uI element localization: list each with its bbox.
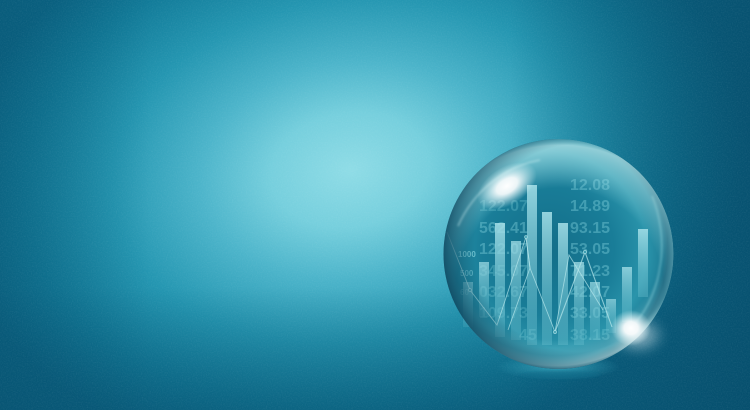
specular highlight: top left [469, 152, 545, 220]
line chart [447, 232, 612, 334]
faded figures behind the chart: 42.07 [570, 284, 610, 301]
faded figures behind the chart: 562.41 [479, 220, 528, 237]
faded figures behind the chart [458, 177, 610, 344]
faded figures behind the chart: 53.05 [570, 241, 610, 258]
faded figures behind the chart: 500 [460, 269, 474, 278]
ball reflection on surface [496, 354, 620, 380]
faded figures behind the chart: 33.05 [570, 305, 610, 322]
glass rim reflections [458, 160, 662, 322]
faded figures behind the chart: 345.07 [479, 263, 528, 280]
faded figures behind the chart: 122.07 [479, 241, 528, 258]
bar chart [463, 185, 648, 345]
crystal ball [443, 138, 674, 370]
glass highlights [443, 138, 674, 370]
faded figures behind the chart: 71.23 [570, 263, 610, 280]
faded figures behind the chart: 45 [519, 327, 537, 344]
faded figures behind the chart: 12.08 [570, 177, 610, 194]
faded figures behind the chart: 1000 [458, 250, 476, 259]
faded figures behind the chart: 60 [460, 288, 469, 297]
faded figures behind the chart: 032.67 [479, 284, 528, 301]
lens flare: bottom right [610, 310, 666, 355]
faded figures behind the chart: 38.15 [570, 327, 610, 344]
faded figures behind the chart: 109.73 [479, 305, 528, 322]
faded figures behind the chart: 93.15 [570, 220, 610, 237]
glass sphere body [444, 139, 674, 369]
faded figures behind the chart: 122.07 [479, 198, 528, 215]
faded figures behind the chart: 14.89 [570, 198, 610, 215]
